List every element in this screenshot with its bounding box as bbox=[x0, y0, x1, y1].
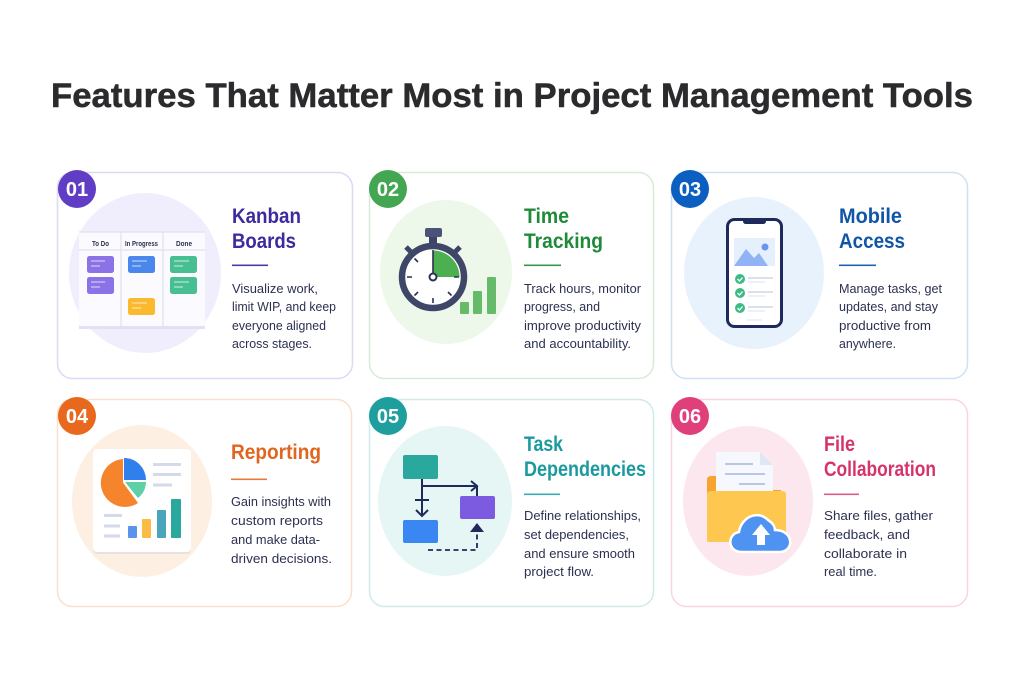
body text: real time. bbox=[824, 564, 877, 579]
body text: updates, and stay bbox=[839, 299, 938, 314]
heading: kanban boards: Kanban bbox=[232, 205, 301, 228]
heading: time tracking: Time bbox=[524, 205, 569, 228]
heading: file collaboration: File bbox=[824, 433, 855, 456]
body text: project flow. bbox=[524, 564, 594, 579]
body text bbox=[824, 508, 934, 579]
heading: file collaboration bbox=[824, 433, 936, 481]
icon circle: dependencies bbox=[378, 426, 512, 576]
badge 01: 01 bbox=[66, 179, 88, 201]
badge 04: 04 bbox=[66, 406, 89, 428]
panel: reporting bbox=[58, 397, 352, 606]
report chart illustration bbox=[93, 449, 191, 554]
badge 05 bbox=[369, 397, 407, 435]
heading: mobile access: Mobile bbox=[839, 205, 902, 228]
kanban board illustration: Done bbox=[176, 241, 192, 248]
badge 03 bbox=[671, 170, 709, 208]
heading: time tracking bbox=[524, 205, 603, 253]
phone illustration bbox=[728, 219, 782, 326]
heading: reporting: Reporting bbox=[231, 441, 321, 464]
stopwatch and bars illustration bbox=[402, 228, 496, 314]
body text bbox=[232, 281, 336, 351]
body text: progress, and bbox=[524, 299, 600, 314]
body text: custom reports bbox=[231, 513, 324, 528]
body text: Gain insights with bbox=[231, 494, 331, 509]
heading: task dependencies bbox=[524, 433, 646, 481]
badge 01 bbox=[58, 170, 96, 208]
title: Features That Matter Most in Project Management Tools bbox=[51, 77, 973, 115]
body text: across stages. bbox=[232, 336, 312, 351]
body text: everyone aligned bbox=[232, 318, 326, 333]
accent rule bbox=[839, 264, 876, 266]
badge 02 bbox=[369, 170, 407, 208]
panel: mobile access bbox=[671, 170, 968, 378]
kanban board illustration: To Do bbox=[92, 241, 109, 248]
body text: driven decisions. bbox=[231, 551, 332, 566]
badge 04 bbox=[58, 397, 96, 435]
panel: kanban boards bbox=[58, 170, 352, 378]
heading: task dependencies: Task bbox=[524, 433, 563, 456]
icon circle: mobile bbox=[684, 197, 824, 349]
icon circle: files bbox=[683, 426, 813, 576]
body text: Share files, gather bbox=[824, 508, 934, 523]
accent rule bbox=[231, 478, 267, 480]
heading: file collaboration: Collaboration bbox=[824, 458, 936, 481]
body text: and make data- bbox=[231, 532, 320, 547]
panel: time tracking bbox=[369, 170, 654, 378]
heading: kanban boards: Boards bbox=[232, 230, 296, 253]
kanban board illustration bbox=[79, 232, 205, 329]
body text bbox=[839, 281, 942, 351]
body text bbox=[524, 508, 641, 579]
body text: Manage tasks, get bbox=[839, 281, 942, 296]
body text: collaborate in bbox=[824, 546, 907, 561]
heading: time tracking: Tracking bbox=[524, 230, 603, 253]
body text: anywhere. bbox=[839, 336, 896, 351]
body text: feedback, and bbox=[824, 527, 910, 542]
badge 06: 06 bbox=[679, 406, 701, 428]
accent rule bbox=[524, 494, 560, 495]
badge 03: 03 bbox=[679, 179, 701, 201]
heading: kanban boards bbox=[232, 205, 301, 253]
flow diagram illustration bbox=[403, 455, 495, 550]
body text: Track hours, monitor bbox=[524, 281, 642, 296]
body text: limit WIP, and keep bbox=[232, 299, 336, 314]
folder and cloud illustration bbox=[707, 452, 790, 552]
body text: Visualize work, bbox=[232, 281, 318, 296]
icon circle: time bbox=[380, 200, 512, 344]
accent rule bbox=[524, 264, 561, 266]
heading: task dependencies: Dependencies bbox=[524, 458, 646, 481]
panel: task dependencies bbox=[369, 397, 654, 606]
body text: improve productivity bbox=[524, 318, 641, 333]
body text: and ensure smooth bbox=[524, 546, 635, 561]
body text bbox=[231, 494, 332, 566]
heading: mobile access bbox=[839, 205, 905, 253]
body text: and accountability. bbox=[524, 336, 631, 351]
body text: Define relationships, bbox=[524, 508, 641, 523]
body text: productive from bbox=[839, 318, 931, 333]
accent rule bbox=[824, 494, 859, 495]
panel: file collaboration bbox=[671, 397, 968, 606]
heading: mobile access: Access bbox=[839, 230, 905, 253]
body text: set dependencies, bbox=[524, 527, 629, 542]
badge 05: 05 bbox=[377, 406, 399, 428]
kanban board illustration: In Progress bbox=[125, 241, 158, 248]
badge 06 bbox=[671, 397, 709, 435]
body text bbox=[524, 281, 642, 351]
icon circle: kanban bbox=[69, 193, 221, 353]
badge 02: 02 bbox=[377, 179, 399, 201]
icon circle: reporting bbox=[72, 425, 212, 577]
accent rule bbox=[232, 264, 268, 266]
